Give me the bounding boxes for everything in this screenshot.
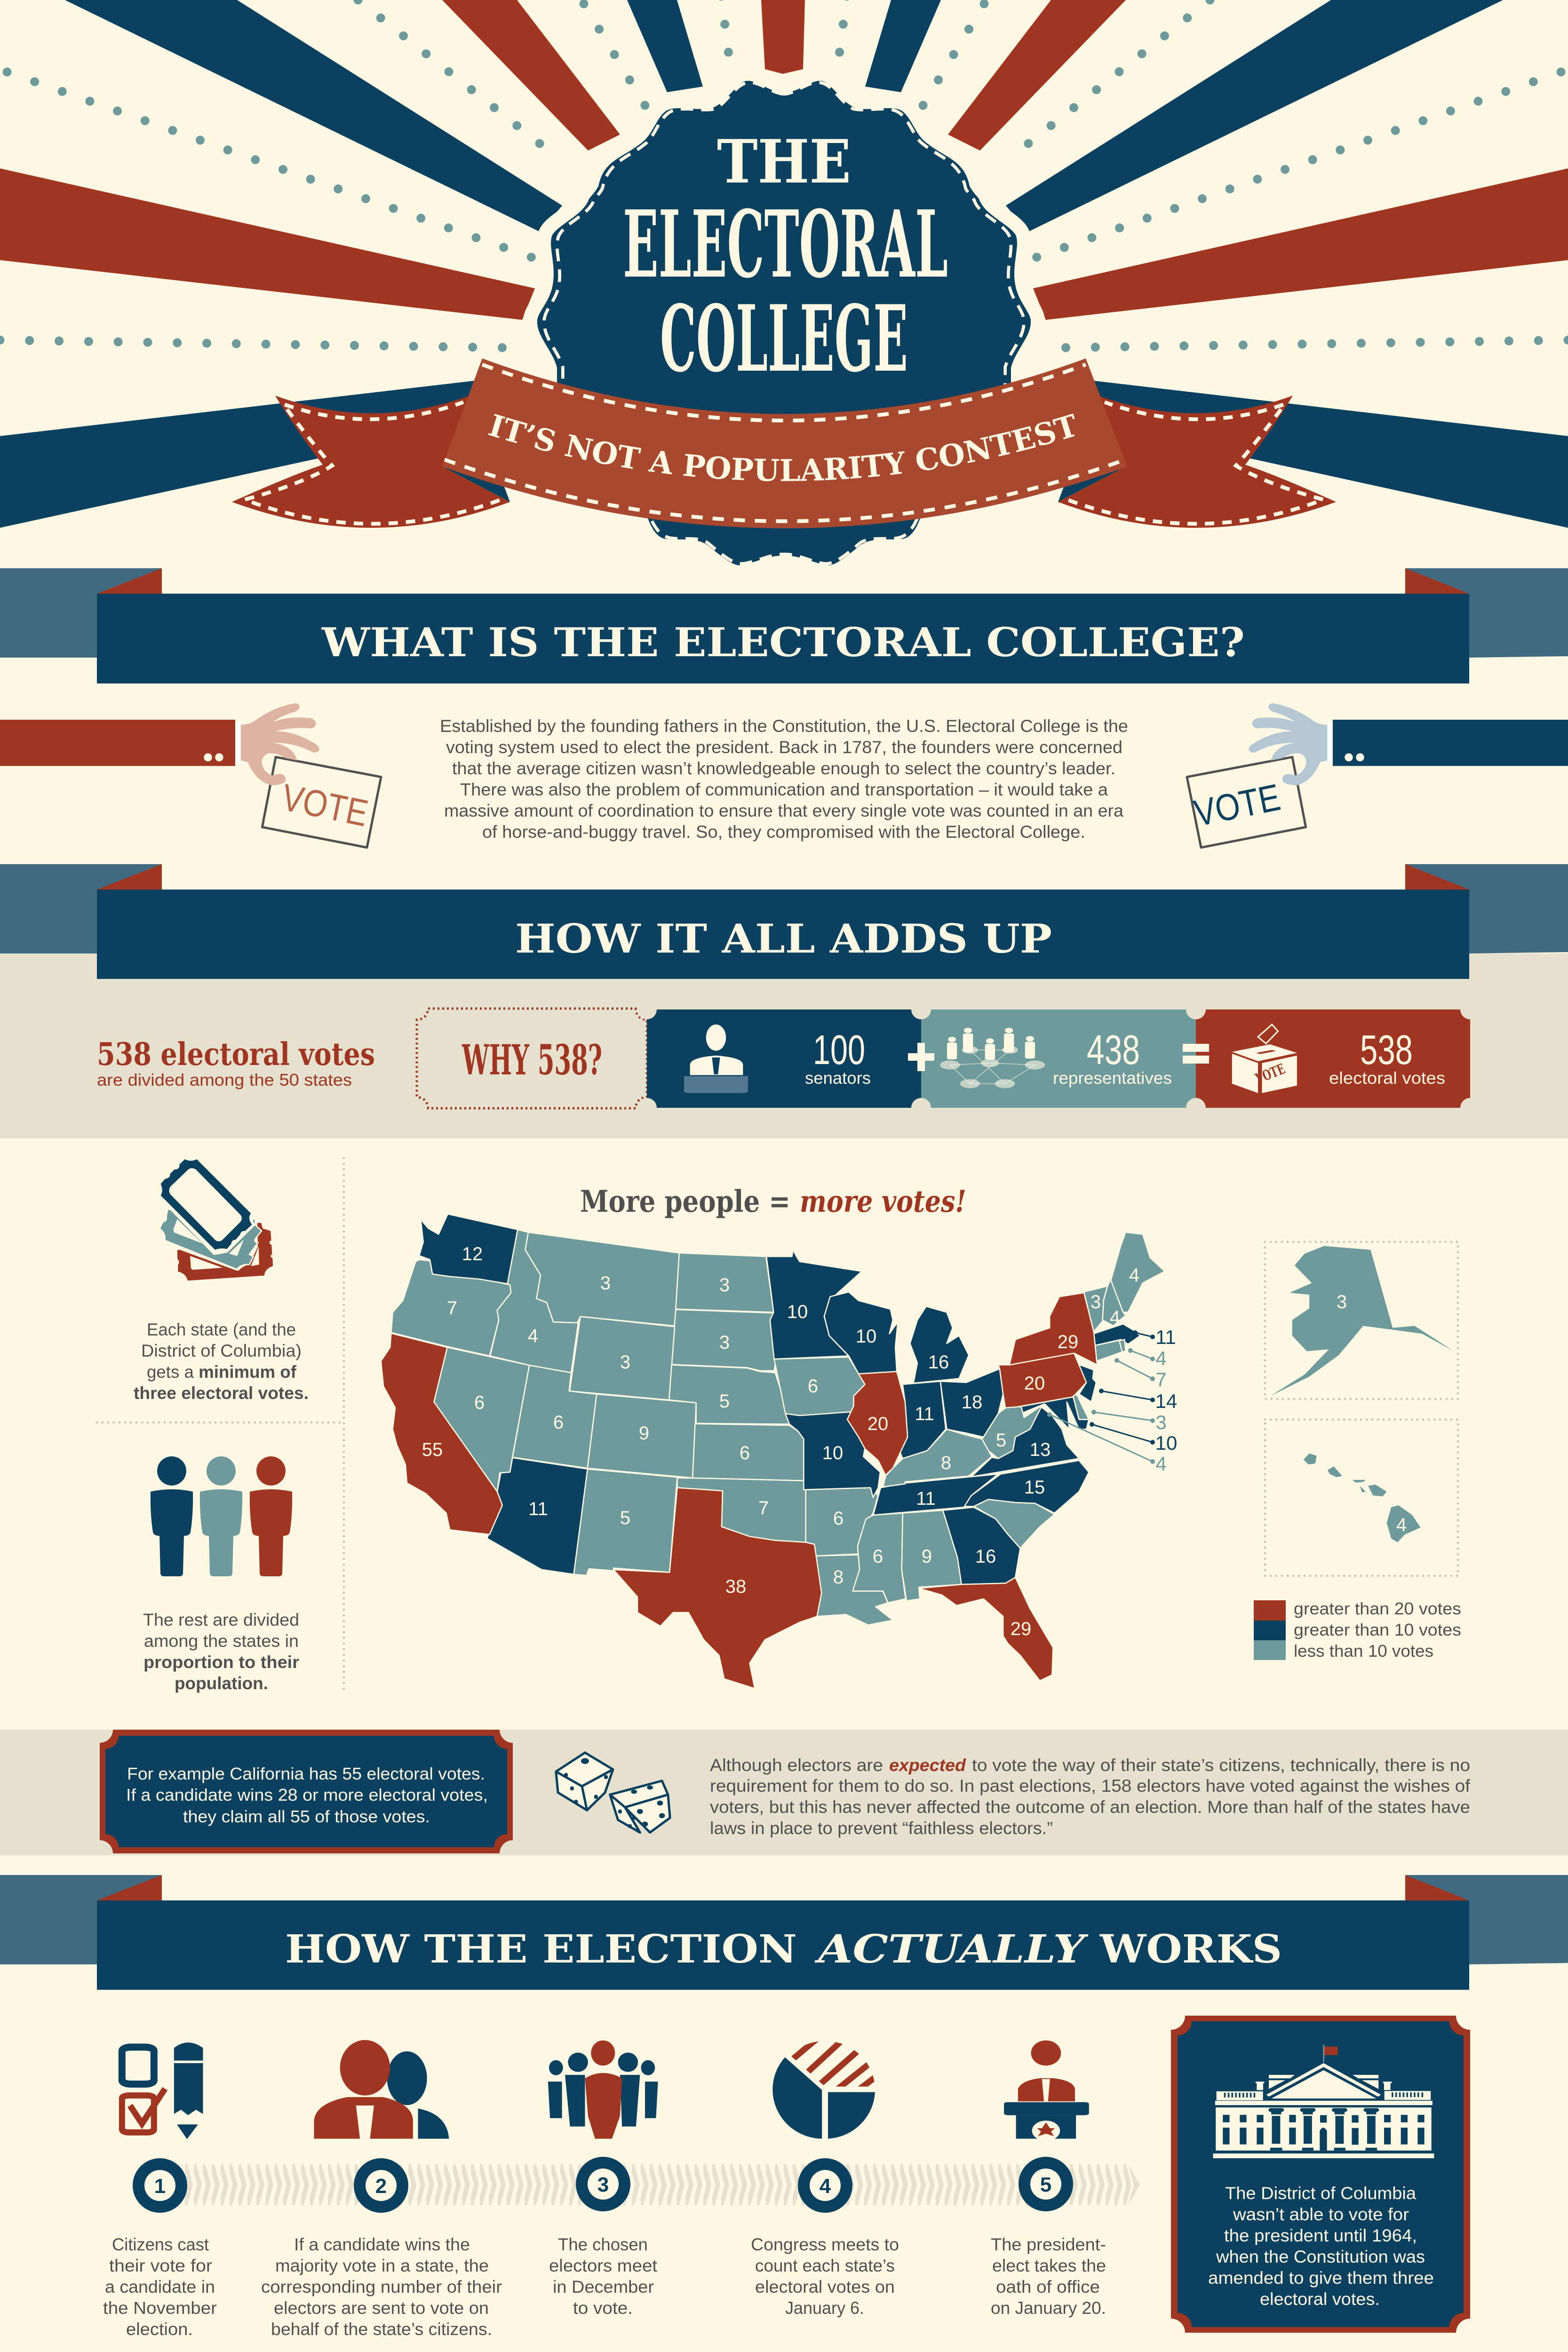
step 3 text (549, 2235, 658, 2318)
step 4 text (751, 2235, 899, 2318)
map heading: more votes! (800, 1184, 966, 1219)
step 4 text: Congress meets to (751, 2235, 899, 2254)
intro paragraph: that the average citizen wasn’t knowledgeable enough to select the country’s leader. (452, 759, 1115, 778)
map heading (580, 1184, 966, 1219)
step 5 text (991, 2235, 1106, 2318)
map vote numbers: 15 (1024, 1477, 1045, 1498)
map vote numbers: 11 (528, 1499, 548, 1519)
panel: electoral votes ticket (1196, 1009, 1470, 1108)
map vote numbers: 3 (600, 1273, 611, 1294)
intro paragraph: voting system used to elect the president. Back in 1787, the founders were concerned (446, 738, 1122, 757)
map vote numbers: 9 (639, 1423, 649, 1444)
banner: how the election actually works: ACTUALLY (814, 1927, 1089, 1972)
step 3 text: electors meet (549, 2256, 658, 2275)
map vote numbers: 3 (719, 1275, 730, 1295)
step 2 text (261, 2235, 502, 2339)
intro paragraph: Established by the founding fathers in the Constitution, the U.S. Electoral College is the (440, 716, 1128, 736)
text: faithless electors: requirement for them to do so. In past elections, 158 electors have voted against the wishes of (710, 1776, 1471, 1796)
banner: what is the electoral college (0, 568, 1568, 683)
map vote numbers: 11 (915, 1404, 934, 1424)
banner: how it all adds up: HOW IT ALL ADDS UP (515, 915, 1052, 962)
icon: ballot and pencil (122, 2042, 203, 2139)
map vote numbers: 9 (922, 1546, 932, 1567)
beige band: faithless electors (0, 1730, 1568, 1855)
step number badges: 3 (597, 2173, 609, 2196)
step 2 text: electors are sent to vote on (274, 2298, 489, 2318)
map vote numbers: 8 (941, 1453, 951, 1473)
timeline arrow (185, 2164, 1140, 2205)
map legend (1254, 1599, 1461, 1661)
ribbon (232, 358, 1336, 528)
map legend: greater than 10 votes (1294, 1620, 1461, 1639)
step 1 text: their vote for (109, 2256, 212, 2275)
text: minimum of three votes: District of Columbia) (141, 1341, 302, 1360)
map vote numbers: 6 (808, 1376, 818, 1397)
text: faithless electors: Although electors are (710, 1756, 883, 1775)
step 5 text: The president- (991, 2235, 1106, 2254)
small state callouts: 4 (1155, 1347, 1167, 1369)
small state callouts (1047, 1326, 1177, 1475)
step 1 text: Citizens cast (112, 2235, 209, 2254)
step number badges (133, 2157, 1073, 2213)
inset: hawaii: 4 (1396, 1515, 1407, 1535)
callout: california example: If a candidate wins 28 or more electoral votes, (126, 1785, 488, 1804)
step number badges: 2 (375, 2175, 387, 2198)
why 538 box: WHY 538? (462, 1035, 602, 1084)
sunburst rays (0, 0, 1568, 528)
why 538 box (417, 1009, 647, 1108)
panel: senators ticket: senators (805, 1068, 871, 1088)
icon: crowd (548, 2041, 658, 2139)
icon: right hand with vote card (1187, 703, 1568, 848)
icon: president at podium (1004, 2041, 1089, 2141)
step number badges: 1 (154, 2175, 166, 2198)
icon: dice (556, 1753, 670, 1833)
banner: how the election actually works: WORKS (1099, 1927, 1282, 1972)
step 4 text: January 6. (785, 2298, 864, 2318)
panel: district of columbia: the president until 1964, (1224, 2226, 1417, 2245)
text: proportion to population: among the states in (144, 1631, 299, 1651)
icon: electors (314, 2040, 449, 2139)
icon: left hand with vote card: VOTE (279, 776, 372, 834)
text: proportion to population (143, 1610, 299, 1693)
step number badges: 5 (1040, 2173, 1051, 2196)
intro paragraph (440, 716, 1128, 842)
map vote numbers: 5 (719, 1391, 730, 1412)
step 2 text: If a candidate wins the (294, 2235, 470, 2254)
map legend: less than 10 votes (1294, 1641, 1433, 1661)
icon: left hand with vote card (0, 703, 381, 848)
title text: ELECTORAL (623, 191, 948, 299)
map vote numbers: 16 (928, 1352, 949, 1373)
title text: COLLEGE (660, 285, 908, 392)
step 4 text: count each state’s (755, 2256, 895, 2275)
step 1 text (103, 2235, 217, 2339)
text: proportion to population: The rest are divided (143, 1610, 299, 1629)
callout: california example: they claim all 55 of those votes. (183, 1807, 430, 1826)
small state callouts: 7 (1155, 1368, 1167, 1391)
step 4 text: electoral votes on (755, 2277, 895, 2296)
map legend: greater than 20 votes (1294, 1599, 1461, 1618)
icon: right hand with vote card: VOTE (1191, 776, 1284, 834)
map vote numbers: 4 (1129, 1265, 1139, 1286)
text: minimum of three votes: gets a minimum of (147, 1362, 297, 1382)
icon: tickets (159, 1159, 273, 1280)
map vote numbers: 8 (833, 1567, 844, 1588)
icon: representatives network (940, 1028, 1045, 1088)
step 2 text: corresponding number of their (261, 2277, 502, 2296)
inset: alaska: 3 (1337, 1292, 1347, 1312)
panel: district of columbia: when the Constitution was (1216, 2247, 1425, 2266)
icon: three people (151, 1456, 292, 1576)
text: faithless electors: voters, but this has never affected the outcome of an election. More than half of the states have (710, 1797, 1470, 1817)
map vote numbers: 12 (462, 1244, 483, 1264)
title badge (530, 74, 1038, 572)
callout: california example (100, 1730, 513, 1853)
intro paragraph: There was also the problem of communication and transportation – it would take a (460, 780, 1108, 799)
map vote numbers: 29 (1058, 1332, 1078, 1352)
text: minimum of three votes: three electoral votes. (134, 1383, 309, 1403)
inset: alaska (1265, 1242, 1458, 1399)
text: minimum of three votes (134, 1320, 309, 1403)
small state callouts: 11 (1155, 1326, 1176, 1348)
panel: senators ticket (647, 1009, 921, 1108)
map vote numbers: 3 (620, 1352, 630, 1373)
banner: what is the electoral college: WHAT IS THE ELECTORAL COLLEGE? (321, 619, 1245, 666)
step 2 text: majority vote in a state, the (275, 2256, 489, 2275)
map vote numbers: 4 (1110, 1307, 1120, 1328)
icon: white house (1213, 2045, 1434, 2158)
map vote numbers: 20 (1024, 1373, 1045, 1394)
ribbon slogan: IT’S NOT A POPULARITY CONTEST (485, 408, 1082, 489)
step 5 text: elect takes the (992, 2256, 1106, 2275)
text: faithless electors: expected (889, 1756, 966, 1775)
map vote numbers: 10 (856, 1326, 876, 1347)
panel: district of columbia: amended to give them three (1208, 2268, 1434, 2288)
step 2 text: behalf of the state’s citizens. (271, 2320, 492, 2339)
538 electoral votes statement: 538 electoral votes (97, 1036, 375, 1073)
map vote numbers: 11 (916, 1488, 936, 1509)
panel: electoral votes ticket: VOTE (1253, 1061, 1288, 1088)
text: proportion to population: proportion to their (143, 1653, 299, 1672)
banner: how the election actually works (0, 1875, 1568, 1990)
map vote numbers: 3 (719, 1332, 730, 1353)
panel: electoral votes ticket: electoral votes (1329, 1068, 1445, 1088)
map vote numbers: 55 (422, 1439, 443, 1460)
icon: pie chart (772, 2042, 875, 2139)
panel: electoral votes ticket: 538 (1360, 1026, 1413, 1073)
inset: hawaii (1265, 1420, 1458, 1576)
text: minimum of three votes: Each state (and the (147, 1320, 296, 1339)
step 5 text: on January 20. (991, 2298, 1106, 2318)
step 1 text: election. (126, 2320, 193, 2339)
step 3 text: in December (553, 2277, 654, 2296)
beige band: adds up (0, 954, 1568, 1138)
callout: california example: For example California has 55 electoral votes. (127, 1764, 485, 1783)
step number badges: 4 (820, 2175, 831, 2198)
us map (381, 1214, 1177, 1689)
panel: senators ticket: 100 (813, 1026, 865, 1073)
intro paragraph: massive amount of coordination to ensure that every single vote was counted in an era (444, 801, 1123, 820)
map vote numbers: 3 (1090, 1292, 1101, 1312)
map vote numbers: 7 (447, 1298, 457, 1319)
map vote numbers: 6 (833, 1508, 844, 1529)
map vote numbers: 4 (528, 1326, 538, 1346)
map heading: More people = (580, 1184, 790, 1219)
title text (623, 127, 948, 392)
panel: district of columbia: electoral votes. (1260, 2289, 1380, 2309)
dotted dividers (97, 1158, 344, 1691)
map vote numbers: 5 (996, 1430, 1006, 1451)
small state callouts: 10 (1155, 1432, 1177, 1454)
map vote numbers: 7 (758, 1498, 769, 1518)
title text: THE (717, 127, 851, 197)
text: faithless electors: laws in place to prevent “faithless electors.” (710, 1819, 1053, 1838)
map vote numbers (422, 1244, 1139, 1639)
map vote numbers: 6 (553, 1412, 564, 1433)
text: faithless electors (710, 1756, 1471, 1838)
banner: how it all adds up (0, 864, 1568, 979)
538 electoral votes statement: are divided among the 50 states (97, 1070, 352, 1089)
step 1 text: a candidate in (105, 2277, 215, 2296)
banner: how the election actually works: HOW THE ELECTION (285, 1927, 797, 1972)
step 3 text: to vote. (573, 2298, 633, 2318)
panel: representatives ticket (921, 1009, 1196, 1108)
map vote numbers: 10 (822, 1443, 843, 1463)
step 3 text: The chosen (558, 2235, 648, 2254)
map vote numbers: 13 (1030, 1439, 1051, 1460)
small state callouts: 4 (1155, 1453, 1167, 1475)
panel: district of columbia (1171, 2016, 1470, 2333)
map vote numbers: 16 (975, 1546, 996, 1567)
text: faithless electors: to vote the way of their state’s citizens, technically, there is no (972, 1756, 1470, 1775)
small state callouts: 14 (1155, 1390, 1177, 1412)
step 1 text: the November (103, 2298, 217, 2318)
icon: senator (684, 1025, 748, 1093)
panel: district of columbia: wasn’t able to vote for (1233, 2205, 1409, 2224)
map vote numbers: 5 (620, 1508, 630, 1528)
panel: district of columbia: The District of Columbia (1225, 2184, 1416, 2203)
panel: representatives ticket: 438 (1087, 1026, 1140, 1073)
small state callouts: 3 (1155, 1411, 1167, 1433)
map vote numbers: 10 (787, 1302, 808, 1322)
map vote numbers: 6 (740, 1443, 750, 1463)
ticket notches and operators (637, 1000, 1480, 1118)
map vote numbers: 20 (868, 1414, 888, 1434)
panel: representatives ticket: representatives (1053, 1068, 1172, 1088)
map vote numbers: 29 (1011, 1619, 1031, 1639)
538 electoral votes statement (97, 1036, 375, 1089)
intro paragraph: of horse-and-buggy travel. So, they compromised with the Electoral College. (482, 822, 1085, 842)
map vote numbers: 6 (474, 1392, 485, 1413)
step 5 text: oath of office (996, 2277, 1100, 2296)
icon: ballot box (1232, 1025, 1297, 1093)
map vote numbers: 6 (873, 1546, 883, 1567)
map vote numbers: 38 (725, 1576, 746, 1597)
text: proportion to population: population. (175, 1674, 268, 1693)
map vote numbers: 18 (962, 1392, 982, 1413)
